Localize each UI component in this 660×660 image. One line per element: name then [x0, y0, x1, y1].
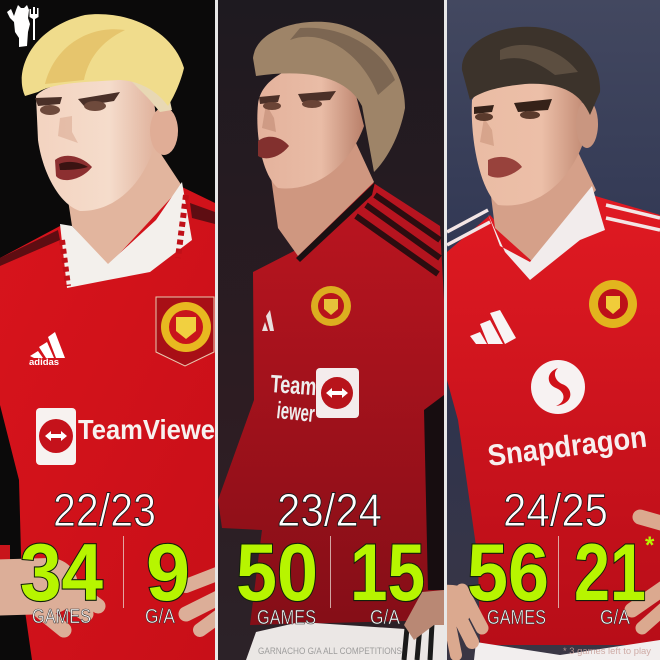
- stat: 22/23: [20, 484, 190, 628]
- collar red trim: [62, 195, 186, 286]
- white shoulder stripes: [447, 205, 660, 245]
- hair shadow: [290, 28, 395, 95]
- left hand on hip: [430, 590, 482, 655]
- games value: 56: [467, 528, 549, 618]
- divider: [558, 536, 559, 608]
- hair highlight: [500, 45, 578, 75]
- dark sleeve: [424, 395, 444, 590]
- season label: 22/23: [53, 484, 156, 536]
- white shorts: [474, 640, 660, 660]
- ear: [576, 100, 598, 148]
- asterisk: *: [645, 532, 655, 559]
- panel: 22/23 season: [0, 0, 222, 660]
- right hand: [632, 517, 660, 628]
- G/A label: G/A: [600, 607, 631, 629]
- divider: [330, 536, 331, 608]
- blond hair: [22, 14, 184, 106]
- neck: [68, 145, 182, 266]
- G/A label: G/A: [370, 607, 401, 629]
- TeamViewer sponsor: [36, 408, 215, 465]
- right hand: [404, 590, 444, 640]
- TeamViewer sponsor: TeamViewe: [78, 414, 215, 445]
- G/A label: G/A: [145, 606, 176, 628]
- panel: 23/24 season: [218, 0, 444, 660]
- eyes and brows: [35, 92, 120, 115]
- ear: [150, 107, 178, 155]
- games label: GAMES: [257, 607, 316, 629]
- panel 2 backdrop: [218, 0, 444, 660]
- club crest: [589, 280, 637, 328]
- bright red shirt 24/25: [447, 195, 660, 645]
- TeamViewer sponsor: [271, 368, 359, 422]
- G/A value: 9: [146, 528, 190, 618]
- black shoulder stripes: [356, 195, 440, 274]
- TeamViewer sponsor: Team: [270, 370, 317, 401]
- face: [257, 65, 364, 188]
- panel 3 backdrop: [447, 0, 660, 660]
- adidas logo: adidas: [29, 357, 59, 368]
- Snapdragon logo: [531, 360, 585, 414]
- divider: [123, 536, 124, 608]
- nose shadow: [262, 108, 276, 132]
- white shorts: [246, 620, 444, 660]
- devil trident: [30, 7, 38, 40]
- stat: 24/25: [467, 484, 655, 629]
- club crest shield: [156, 297, 214, 366]
- club crest: [311, 286, 351, 326]
- dark hair: [462, 27, 600, 115]
- left hand on hip: [0, 574, 98, 630]
- panel: 24/25 season: [430, 0, 660, 660]
- red kit shirt 22/23: [0, 186, 215, 660]
- mouth: [258, 137, 289, 158]
- face: [36, 78, 158, 211]
- mouth: [55, 156, 92, 180]
- neck: [271, 143, 374, 256]
- mouth: [488, 157, 522, 178]
- eyes and brows: [474, 99, 552, 121]
- footnote: games left: * 3 games left to play: [563, 646, 652, 656]
- adidas logo: [470, 310, 516, 344]
- nose shadow: [58, 116, 78, 143]
- adidas logo: [29, 332, 65, 368]
- neck: [488, 135, 596, 264]
- TeamViewer sponsor: iewer: [275, 397, 316, 428]
- G/A value: 15: [350, 528, 425, 618]
- hair highlight: [45, 29, 125, 84]
- light brown hair: [253, 22, 405, 172]
- white collar: [488, 186, 605, 280]
- Snapdragon sponsor: Snapdragon: [486, 421, 649, 473]
- games label: GAMES: [32, 606, 91, 628]
- shirt collar: [296, 182, 375, 262]
- shoulder pattern: [0, 203, 215, 266]
- undercut fade: [132, 82, 172, 112]
- games value: 50: [236, 528, 318, 618]
- devil head and body: [7, 5, 30, 47]
- mouth opening: [59, 162, 88, 170]
- adidas stripes: [262, 310, 274, 331]
- eyes and brows: [259, 91, 336, 110]
- panel 1 backdrop: [0, 0, 215, 660]
- dark red shirt 23/24: [218, 182, 444, 625]
- right hand on hip: [186, 572, 222, 630]
- stat: 23/24: [236, 484, 425, 629]
- nose shadow: [480, 118, 494, 146]
- games value: 34: [20, 528, 103, 618]
- games label: GAMES: [487, 607, 546, 629]
- club devil logo: [7, 5, 38, 47]
- face: [472, 74, 588, 206]
- season label: 24/25: [503, 484, 608, 536]
- season label: 23/24: [277, 484, 382, 536]
- black shorts stripes: [404, 624, 432, 660]
- footnote: source: GARNACHO G/A ALL COMPETITIONS: [258, 646, 402, 656]
- sleeve cuff: [0, 545, 10, 561]
- white collar: [60, 182, 192, 288]
